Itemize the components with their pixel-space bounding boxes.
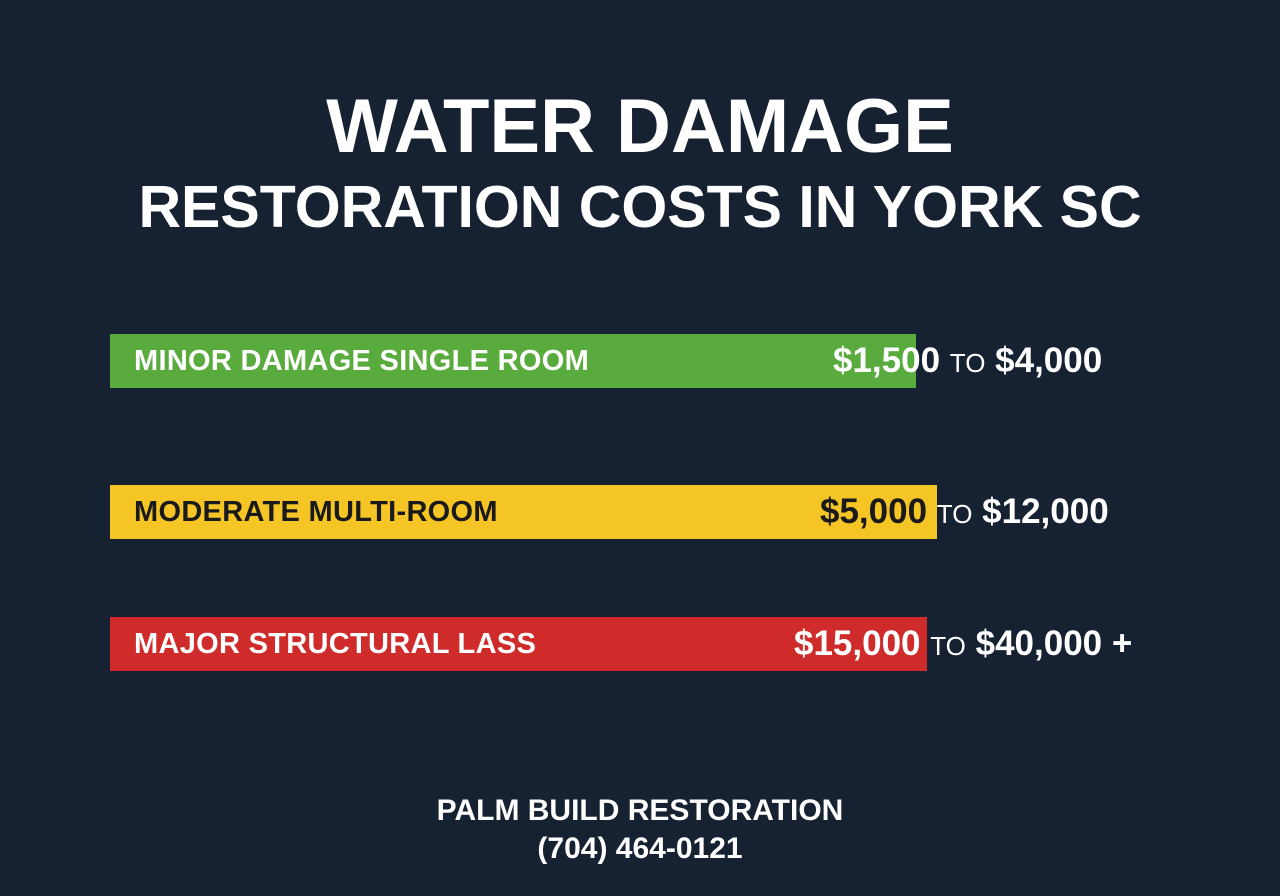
title (138, 84, 1142, 240)
price: minor: $1,500 TO $4,000 (833, 341, 1102, 380)
bar: major (110, 617, 927, 671)
bar: major: MAJOR STRUCTURAL LASS (134, 628, 536, 660)
footer (437, 794, 843, 865)
bar: minor damage: MINOR DAMAGE SINGLE ROOM (134, 345, 589, 377)
bar: moderate: MODERATE MULTI-ROOM (134, 496, 498, 528)
price: major: $15,000 TO $40,000 + (794, 624, 1132, 663)
price: moderate: $5,000 TO $12,000 (820, 492, 1109, 531)
title: RESTORATION COSTS IN YORK SC (138, 174, 1142, 240)
bar: minor damage (110, 334, 916, 388)
footer: PALM BUILD RESTORATION (437, 794, 843, 827)
footer: (704) 464-0121 (537, 832, 743, 865)
bar: moderate (110, 485, 937, 539)
title: WATER DAMAGE (326, 84, 954, 169)
